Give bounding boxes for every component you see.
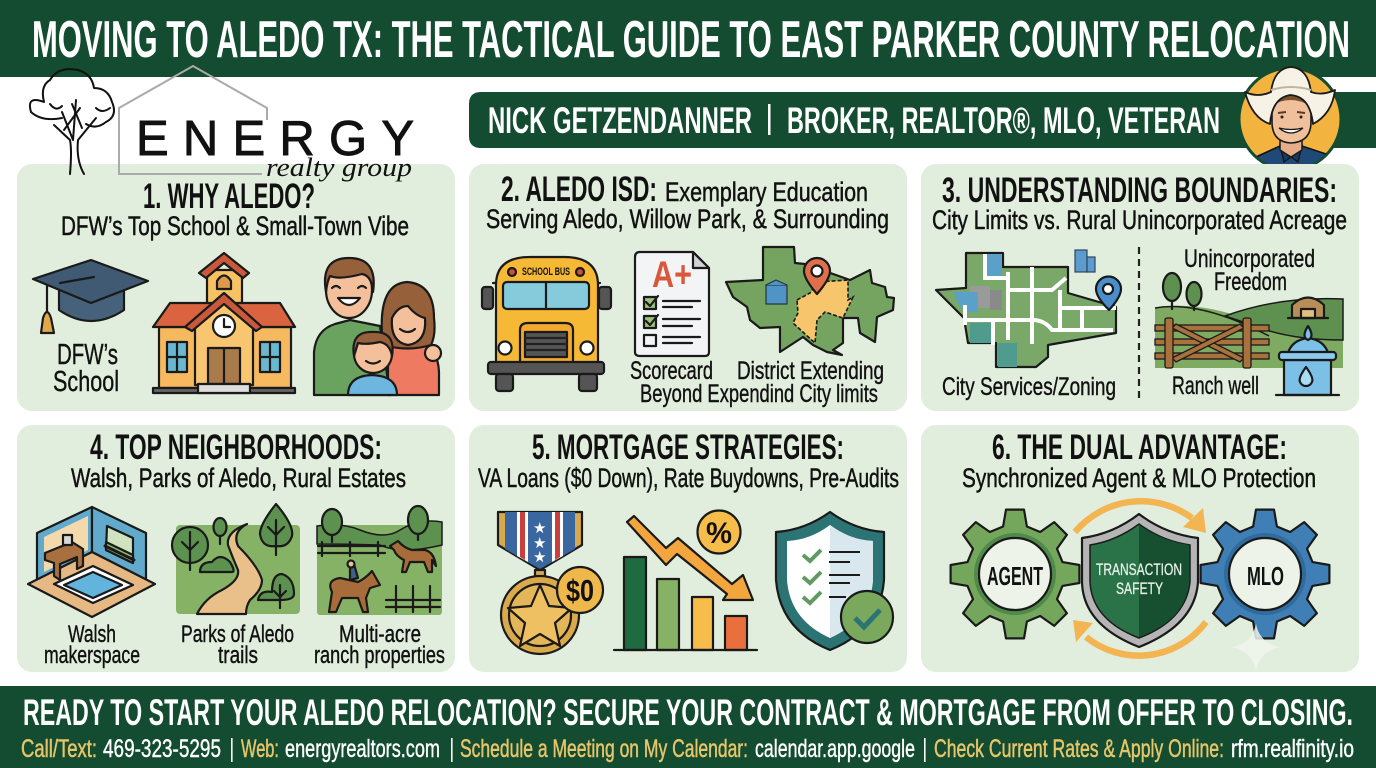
chart: falling rates bars (614, 510, 757, 650)
footer call to action (0, 686, 1376, 768)
label: DFW's School: DFW’s (57, 339, 118, 371)
subheading: why Aledo: DFW’s Top School & Small-Town Vibe (61, 211, 409, 241)
label: ranch well: Ranch well (1172, 372, 1259, 400)
panel: Aledo ISD (469, 164, 907, 411)
icon: park trails (172, 504, 300, 614)
contact details: calendar.app.google (755, 735, 915, 763)
icon: ranch and gate (1155, 273, 1343, 368)
icon: scorecard: A+ (652, 254, 692, 295)
icon: district map (726, 247, 894, 355)
icon: medal with $0: $0 (566, 573, 594, 608)
labels: scorecard and district: Scorecard (630, 357, 713, 385)
heading: Aledo ISD: Exemplary Education (665, 177, 868, 207)
heading: Aledo ISD (501, 170, 868, 209)
wordmark: realty group: realty group (266, 153, 412, 182)
panel: top neighborhoods (17, 425, 455, 672)
heading: why Aledo: 1. WHY ALEDO? (143, 177, 315, 216)
label: unincorporated freedom: Unincorporated (1184, 245, 1315, 273)
icon: schoolhouse (153, 253, 295, 393)
heading: neighborhoods: 4. TOP NEIGHBORHOODS: (90, 428, 382, 467)
heading: Aledo ISD: 2. ALEDO ISD: (501, 170, 657, 209)
labels: neighborhoods: Parks of Aledo (181, 621, 294, 648)
icon: transaction safety shield (1082, 514, 1198, 647)
portrait: agent in cowboy hat (1239, 67, 1341, 172)
bus sign text: SCHOOL BUS (522, 266, 570, 278)
contact details: Call/Text: (21, 735, 97, 763)
contact details: Schedule a Meeting on My Calendar: (460, 735, 748, 763)
subheading: neighborhoods: Walsh, Parks of Aledo, Rural Estates (71, 463, 406, 493)
contact details (21, 735, 1354, 763)
icon: agent gear: AGENT (987, 561, 1043, 591)
icon: medal with $0: ★ (533, 520, 546, 537)
icon: transaction safety shield: TRANSACTION (1096, 560, 1182, 579)
icon: medal with $0: ★ (533, 549, 546, 566)
icon: transaction safety shield: SAFETY (1116, 579, 1163, 598)
icon: school bus (482, 257, 611, 391)
icon: ranch well (1276, 326, 1339, 395)
labels: neighborhoods (44, 621, 445, 669)
labels: scorecard and district (630, 357, 884, 408)
labels: neighborhoods: trails (218, 642, 258, 669)
icon: makerspace room (28, 507, 155, 617)
label: unincorporated freedom (1184, 245, 1315, 296)
labels: neighborhoods: Walsh (68, 621, 116, 648)
arrows: cycle (1073, 501, 1206, 656)
contact details: Check Current Rates & Apply Online: (934, 735, 1224, 763)
labels: scorecard and district: District Extending (737, 357, 884, 385)
name banner: NICK GETZENDANNER (488, 100, 752, 141)
panel: mortgage strategies (469, 425, 907, 672)
label: DFW's School: School (53, 366, 119, 398)
icon: family (314, 258, 441, 395)
icon: MLO gear: MLO (1247, 561, 1284, 591)
divider: dashed line (1138, 247, 1140, 400)
labels: neighborhoods: Multi-acre (339, 621, 421, 648)
icon: MLO gear (1201, 510, 1329, 638)
icon: scorecard (635, 252, 709, 356)
heading: mortgage: 5. MORTGAGE STRATEGIES: (532, 428, 844, 467)
wordmark: Energy: ENERGY (136, 112, 414, 166)
label: city services: City Services/Zoning (942, 373, 1116, 401)
percent symbol: % (706, 517, 732, 550)
name banner (469, 92, 1376, 148)
icon: medal with $0: ★ (533, 535, 546, 552)
icon: audit shield (776, 512, 893, 650)
icon: agent gear (951, 510, 1079, 638)
icon: city map (936, 250, 1121, 367)
labels: scorecard and district: Beyond Expendind City limits (640, 380, 878, 408)
labels: neighborhoods: ranch properties (314, 642, 445, 669)
icon: medal with $0 (498, 512, 603, 654)
panel: dual advantage (921, 425, 1359, 672)
subheading: mortgage: VA Loans ($0 Down), Rate Buydowns, Pre-Audits (478, 463, 899, 493)
logo: Energy Realty Group (30, 66, 414, 182)
decorative sparkle (1231, 624, 1281, 671)
panel: why Aledo (17, 164, 455, 411)
icon: graduation cap (33, 260, 148, 333)
subheading: Aledo ISD: Serving Aledo, Willow Park, & Surrounding (486, 204, 889, 234)
icon: tree (30, 69, 114, 174)
label: DFW's School (53, 339, 119, 398)
contact details: energyrealtors.com (285, 735, 440, 763)
icon: ranch properties (317, 506, 442, 615)
panel: understanding boundaries (921, 164, 1359, 411)
label: unincorporated freedom: Freedom (1214, 268, 1287, 296)
contact details: Web: (241, 735, 279, 763)
icon: house outline (119, 66, 267, 174)
contact details: 469-323-5295 (103, 735, 221, 763)
labels: neighborhoods: makerspace (44, 642, 140, 669)
